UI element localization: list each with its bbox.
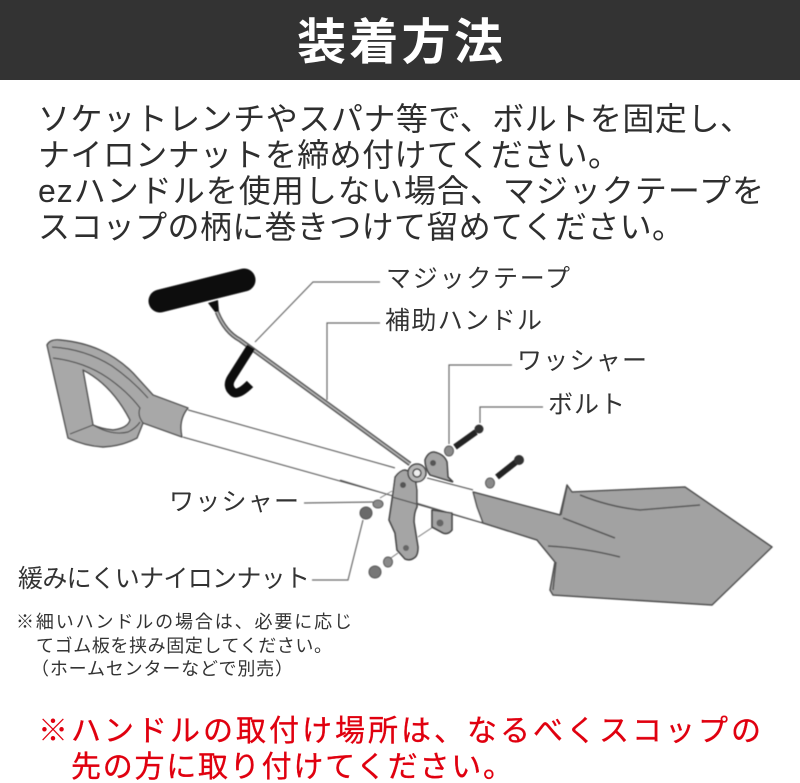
note about thin handles [16, 612, 352, 679]
velcro strap hook [229, 347, 251, 393]
instructions text block: ナイロンナットを締め付けてください。 [38, 137, 620, 173]
title banner: 装着方法 [297, 16, 503, 70]
leader lines [255, 282, 543, 580]
instructions text block: ソケットレンチやスパナ等で、ボルトを固定し、 [38, 101, 752, 137]
warning text: ハンドルの取付け場所は、なるべくスコップの [71, 715, 761, 748]
rear clamp plate [425, 452, 453, 482]
lower back plate [432, 510, 452, 534]
shovel shaft [183, 410, 483, 523]
shovel blade [473, 485, 772, 605]
label: velcro tape: マジックテープ [386, 265, 570, 293]
front clamp plate [380, 464, 483, 560]
note about thin handles: （ホームセンターなどで別売） [31, 659, 293, 679]
warning text [71, 715, 761, 783]
D-grip handle [47, 340, 188, 447]
label: washer lower: ワッシャー [169, 488, 299, 516]
washers and nuts [360, 446, 494, 578]
label: nylon lock nut: 緩みにくいナイロンナット [18, 565, 310, 593]
auxiliary handle T-grip [160, 280, 410, 464]
instructions text block: スコップの柄に巻きつけて留めてください。 [38, 209, 684, 245]
label: washer upper: ワッシャー [517, 347, 647, 375]
label: auxiliary handle: 補助ハンドル [385, 307, 542, 335]
part labels [18, 265, 647, 593]
note about thin handles: ※細いハンドルの場合は、必要に応じ [16, 612, 352, 632]
instructions text block: ezハンドルを使用しない場合、マジックテープを [38, 173, 764, 209]
title banner [0, 0, 800, 80]
ring washer [408, 464, 426, 482]
instructions text block [38, 101, 764, 245]
bolts [455, 424, 524, 477]
shovel diagram [47, 280, 772, 605]
label: bolt: ボルト [548, 391, 625, 419]
note about thin handles: てゴム板を挟み固定してください。 [36, 636, 332, 656]
red warning mark: ※ [38, 715, 68, 748]
